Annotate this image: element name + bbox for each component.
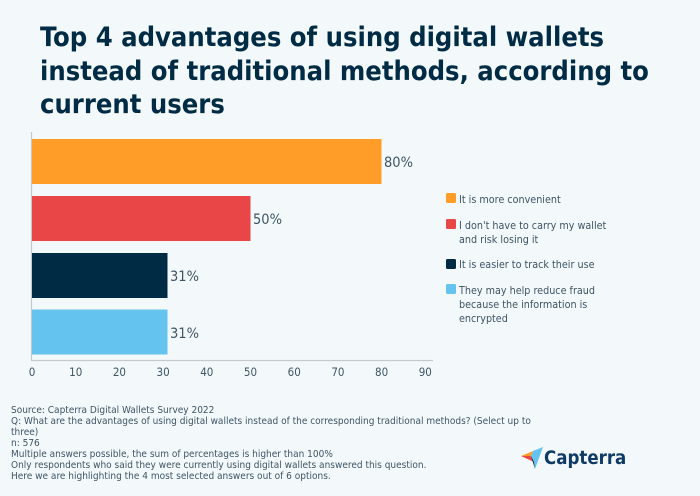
source notes [11, 404, 531, 482]
source notes: three) [11, 427, 38, 438]
legend text: track: It is easier to track their use [459, 258, 594, 271]
bar: reduce fraud 31% [32, 310, 199, 354]
x axis labels: 50 [244, 365, 257, 379]
source notes: Source: Capterra Digital Wallets Survey 2022 [11, 404, 214, 416]
source notes: n: 576 [11, 438, 40, 449]
x axis labels: 30 [157, 365, 170, 379]
x axis labels: 20 [113, 365, 126, 379]
legend text: fraud: encrypted [459, 312, 508, 325]
bar: carry my wallet 50%: 50% [253, 212, 282, 228]
source notes: Only respondents who said they were currently using digital wallets answered this question. [11, 460, 426, 471]
icon: Capterra arrow [521, 447, 543, 469]
Capterra logo [521, 447, 626, 469]
title [40, 22, 649, 120]
x axis labels: 40 [200, 365, 213, 379]
legend swatch: orange [446, 193, 456, 203]
legend [446, 192, 606, 325]
legend text: wallet: I don't have to carry my wallet [459, 218, 606, 232]
bar: carry my wallet 50% [32, 196, 282, 241]
source notes: Here we are highlighting the 4 most selected answers out of 6 options. [11, 471, 331, 482]
legend text: fraud: because the information is [459, 298, 587, 311]
title: current users [40, 89, 225, 120]
source notes: Q: What are the advantages of using digital wallets instead of the corresponding traditional methods? (Select up to [11, 416, 531, 427]
x axis labels: 60 [288, 365, 301, 379]
bar chart [29, 132, 433, 379]
legend text: wallet [459, 218, 606, 246]
chart axes [32, 132, 433, 360]
title: Top 4 advantages of using digital wallets [40, 22, 604, 53]
bar: It is more convenient 80%: 80% [384, 155, 413, 171]
bar: reduce fraud 31%: 31% [170, 326, 199, 342]
legend swatch: red [446, 219, 456, 229]
legend text: fraud: They may help reduce fraud [459, 284, 595, 297]
x axis labels: 0 [29, 365, 35, 379]
bar: easier to track 31% [32, 253, 199, 298]
x axis labels [29, 365, 432, 379]
legend text: wallet: and risk losing it [459, 232, 538, 246]
bar: easier to track 31%: 31% [170, 269, 199, 285]
x axis labels: 90 [419, 365, 432, 379]
title: instead of traditional methods, according to [40, 56, 649, 86]
logo wordmark: Capterra [544, 448, 626, 469]
legend text: fraud [458, 284, 595, 325]
x axis labels: 80 [375, 365, 388, 379]
legend swatch: blue [446, 284, 456, 294]
source notes: Multiple answers possible, the sum of percentages is higher than 100% [11, 449, 333, 460]
legend swatch: navy [446, 259, 456, 269]
x axis labels: 10 [69, 365, 82, 379]
legend text: convenient: It is more convenient [459, 192, 561, 206]
bar: It is more convenient 80% [32, 139, 413, 184]
x axis labels: 70 [331, 365, 344, 379]
